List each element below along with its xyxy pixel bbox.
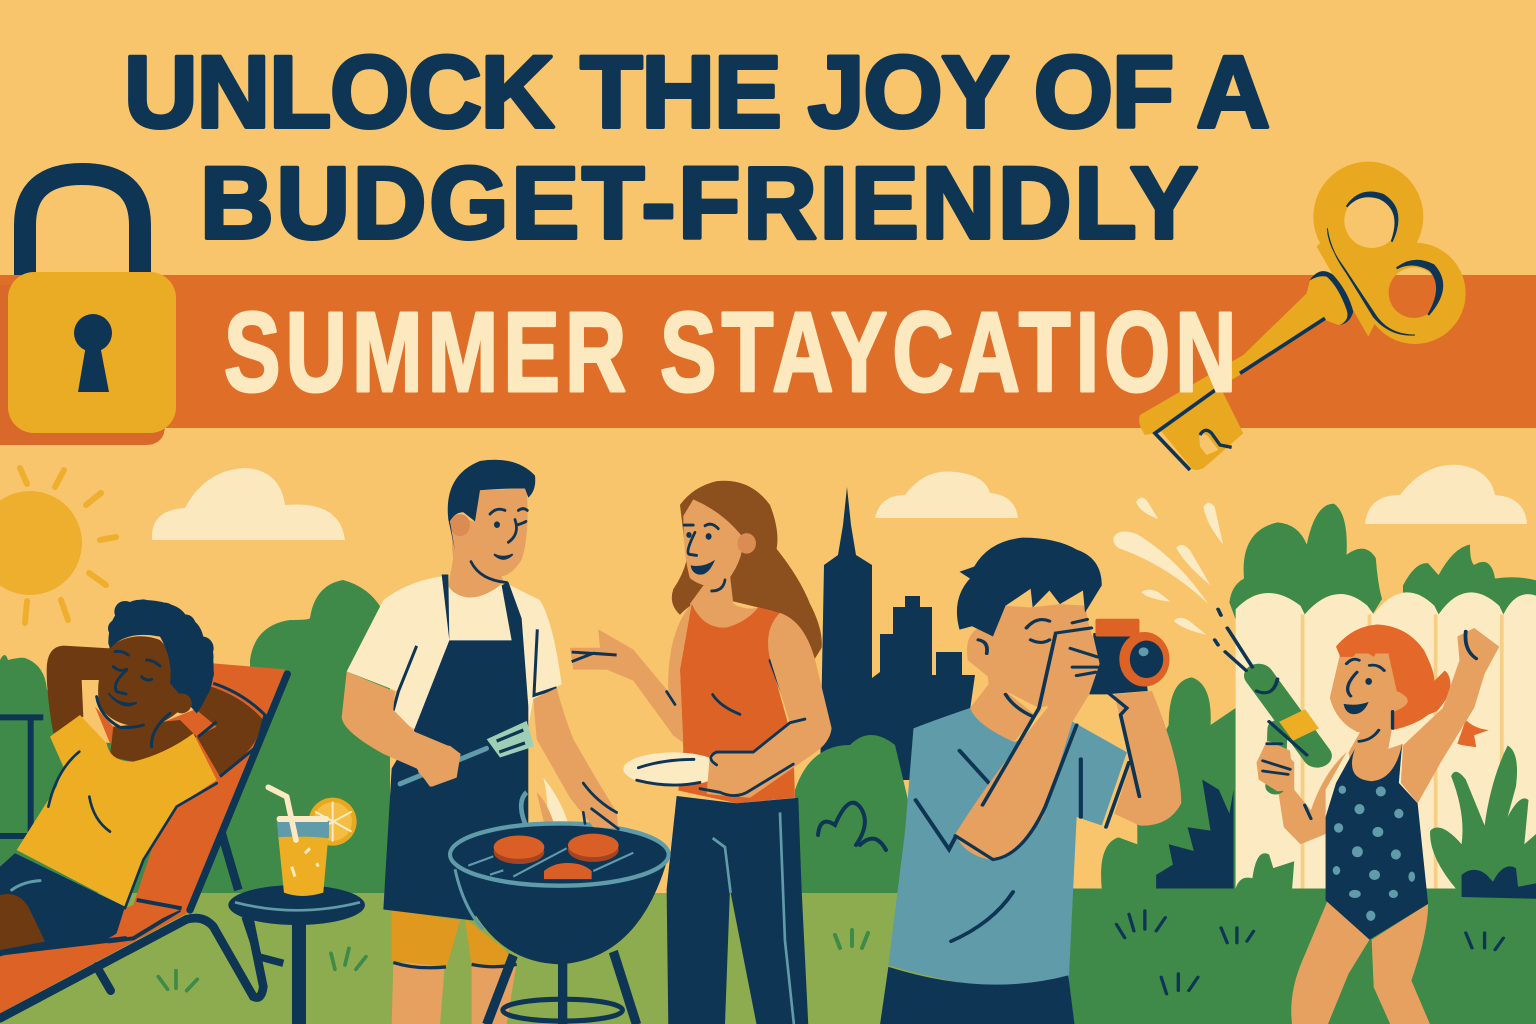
- camera: [1089, 619, 1170, 694]
- neck: [970, 671, 1043, 742]
- backyard rail: [0, 717, 43, 837]
- hair back and ponytail: [1336, 625, 1450, 730]
- charcoal grill with burgers: [450, 779, 669, 964]
- hand on spatula: [415, 746, 461, 787]
- arms: [342, 671, 618, 829]
- hand over grill: [570, 779, 618, 829]
- navy trousers: [880, 967, 1075, 1024]
- title: first two lines: UNLOCK THE JOY OF A: [124, 35, 1270, 149]
- water splash: [1113, 498, 1223, 645]
- hair: [448, 460, 535, 551]
- hair: [672, 481, 822, 659]
- water gun: [1225, 628, 1317, 786]
- grass tufts: mid lawn: [835, 930, 868, 948]
- arm, strap and face lines: [955, 619, 1139, 860]
- teal t-shirt: [888, 708, 1127, 991]
- burger patties: [494, 834, 619, 879]
- clouds: [152, 465, 1527, 540]
- title: first two lines: BUDGET-FRIENDLY: [200, 146, 1198, 260]
- glass of juice: [268, 787, 329, 896]
- legs: [392, 963, 517, 1024]
- banner: [0, 275, 1536, 428]
- shorts: [0, 853, 125, 952]
- pillow: [95, 707, 215, 750]
- person: woman with plate: [570, 481, 832, 1024]
- grill legs: [487, 952, 637, 1024]
- cream t-shirt: [347, 576, 562, 736]
- arm with hand: [1257, 739, 1347, 844]
- grass tufts: [158, 948, 366, 991]
- facial details: [1305, 659, 1393, 819]
- person: relaxing on lounger with drink: [0, 599, 366, 1024]
- lounger: [0, 663, 287, 1018]
- facial details: [684, 524, 725, 591]
- face: [683, 499, 743, 586]
- shorts: [392, 909, 517, 967]
- curly hair: [108, 599, 214, 713]
- swimsuit: [1326, 744, 1428, 940]
- arm holding plate: [707, 613, 832, 798]
- face: [967, 604, 1098, 708]
- navy trousers: [667, 796, 808, 1024]
- icon: golden key: [1139, 162, 1466, 470]
- face: [98, 636, 190, 727]
- orange tank top: [678, 604, 795, 803]
- title: first two lines: [124, 35, 1270, 260]
- neck and chest: [1349, 725, 1403, 787]
- skyline: [820, 487, 975, 780]
- raised arm: [570, 604, 692, 743]
- lemon slice: [309, 798, 357, 846]
- polka dots: [1333, 786, 1415, 921]
- icon: padlock: [0, 174, 176, 445]
- line-art in bush: [818, 803, 886, 850]
- facial details: [97, 651, 170, 747]
- arms behind head: [47, 646, 263, 777]
- neck: [448, 549, 503, 604]
- side table: [228, 885, 365, 1024]
- banner text: summer staycation: SUMMER STAYCATION: [224, 290, 1241, 416]
- ground: light lawn: [0, 893, 1090, 1024]
- facial details: [471, 509, 527, 583]
- face: [1330, 653, 1408, 733]
- foreground arm and hand: [955, 628, 1100, 860]
- face: [452, 488, 528, 576]
- spatula: [400, 721, 534, 784]
- plate: [623, 752, 723, 786]
- apron: [383, 574, 528, 920]
- backyard right: fence, foliage and lawn: [1068, 504, 1536, 1024]
- neck and chest: [690, 574, 760, 630]
- legs: [1291, 900, 1430, 1024]
- background bushes: [0, 580, 930, 893]
- person: photographer with camera: [880, 538, 1181, 1024]
- hand on gun: [1257, 740, 1294, 791]
- smoke: [543, 778, 568, 823]
- yellow shirt: [17, 715, 217, 907]
- person: girl with water gun: [1225, 625, 1499, 1024]
- raised arm and hand: [1401, 628, 1499, 803]
- person: man at the grill: [342, 460, 637, 1024]
- icon: sun: [0, 468, 116, 623]
- hair: [957, 538, 1102, 636]
- arm behind camera: [1114, 691, 1181, 826]
- leg: [0, 894, 45, 950]
